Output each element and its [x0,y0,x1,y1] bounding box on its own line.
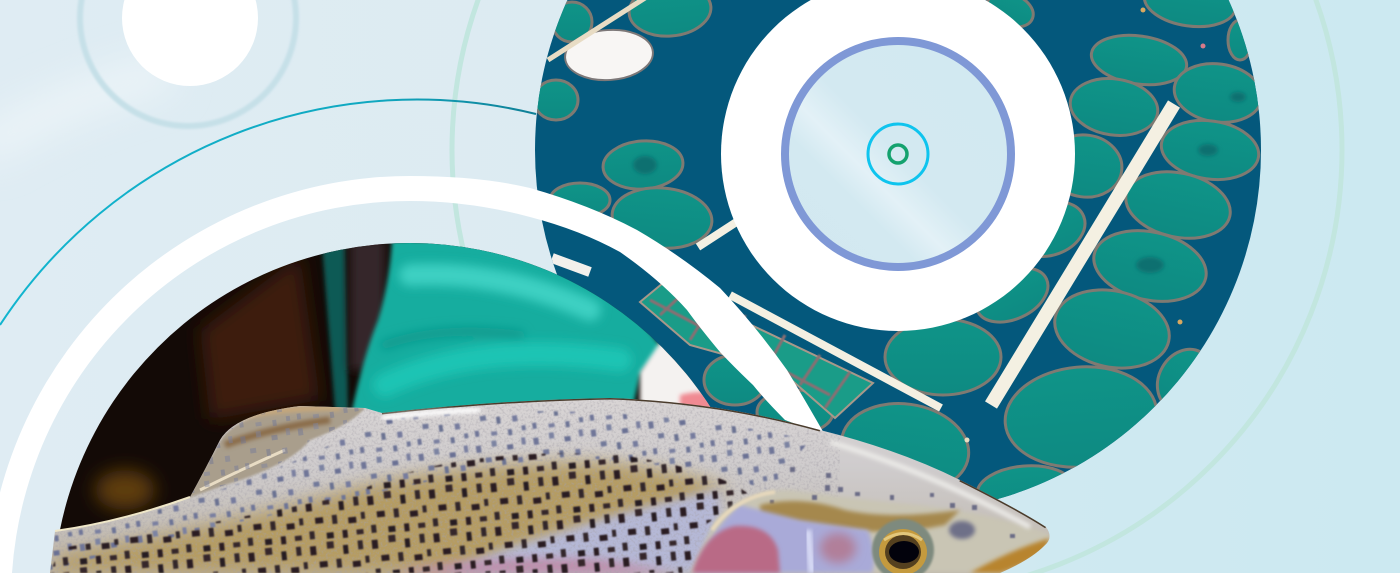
white glove [636,342,710,407]
spots: grey-blue upper [50,411,810,570]
target disc: white ring with blue ring and centre rings [721,0,1075,331]
head sparse spots [770,467,1015,538]
pink cuff [677,389,710,407]
pink lateral stripe [390,559,680,573]
decorative circle: top-left white dot with ring [80,0,296,126]
fine speckle noise [40,390,840,573]
second pink patch [820,533,856,563]
lavender belly [440,490,720,573]
head upper highlight [830,442,1030,527]
gill cover [695,505,874,573]
cheek dark patch [949,521,975,539]
spots: dark lower [50,453,750,573]
white swoosh arc [0,176,825,573]
green ring [889,145,907,163]
fin speckle [192,408,358,493]
dark teal stripe [322,245,348,410]
amber blur [95,470,155,510]
back highlight [382,410,480,418]
white covered pen [563,27,655,83]
trout fish [40,390,1060,573]
sleeve highlights [385,274,620,385]
snout gold [970,538,1050,573]
floating net pens [534,0,1266,518]
belly-edge highlight [55,497,190,531]
pale green outer ring [452,0,1342,573]
brown background blur [200,255,320,420]
teal sleeve [350,240,662,420]
pen details [633,92,1246,273]
cream gill edge [712,492,775,530]
background sheen [0,70,170,150]
walkways [548,0,1174,408]
cyan ring [868,124,928,184]
gold cheek patch [760,501,960,532]
head [690,490,1052,573]
blue-white streak [808,530,812,573]
eye [872,519,934,573]
photo circle: worker in teal sleeve [60,243,710,530]
tan flank band [50,462,730,573]
thin teal arc [0,100,536,325]
photo circle: aerial view of fish farm pens [530,0,1270,520]
maroon blur [350,240,385,370]
back edge line [382,398,1046,527]
netted rectangular pen [640,283,873,418]
pink gill patch [692,526,780,573]
dorsal fin [188,406,365,498]
buoys [964,8,1206,442]
